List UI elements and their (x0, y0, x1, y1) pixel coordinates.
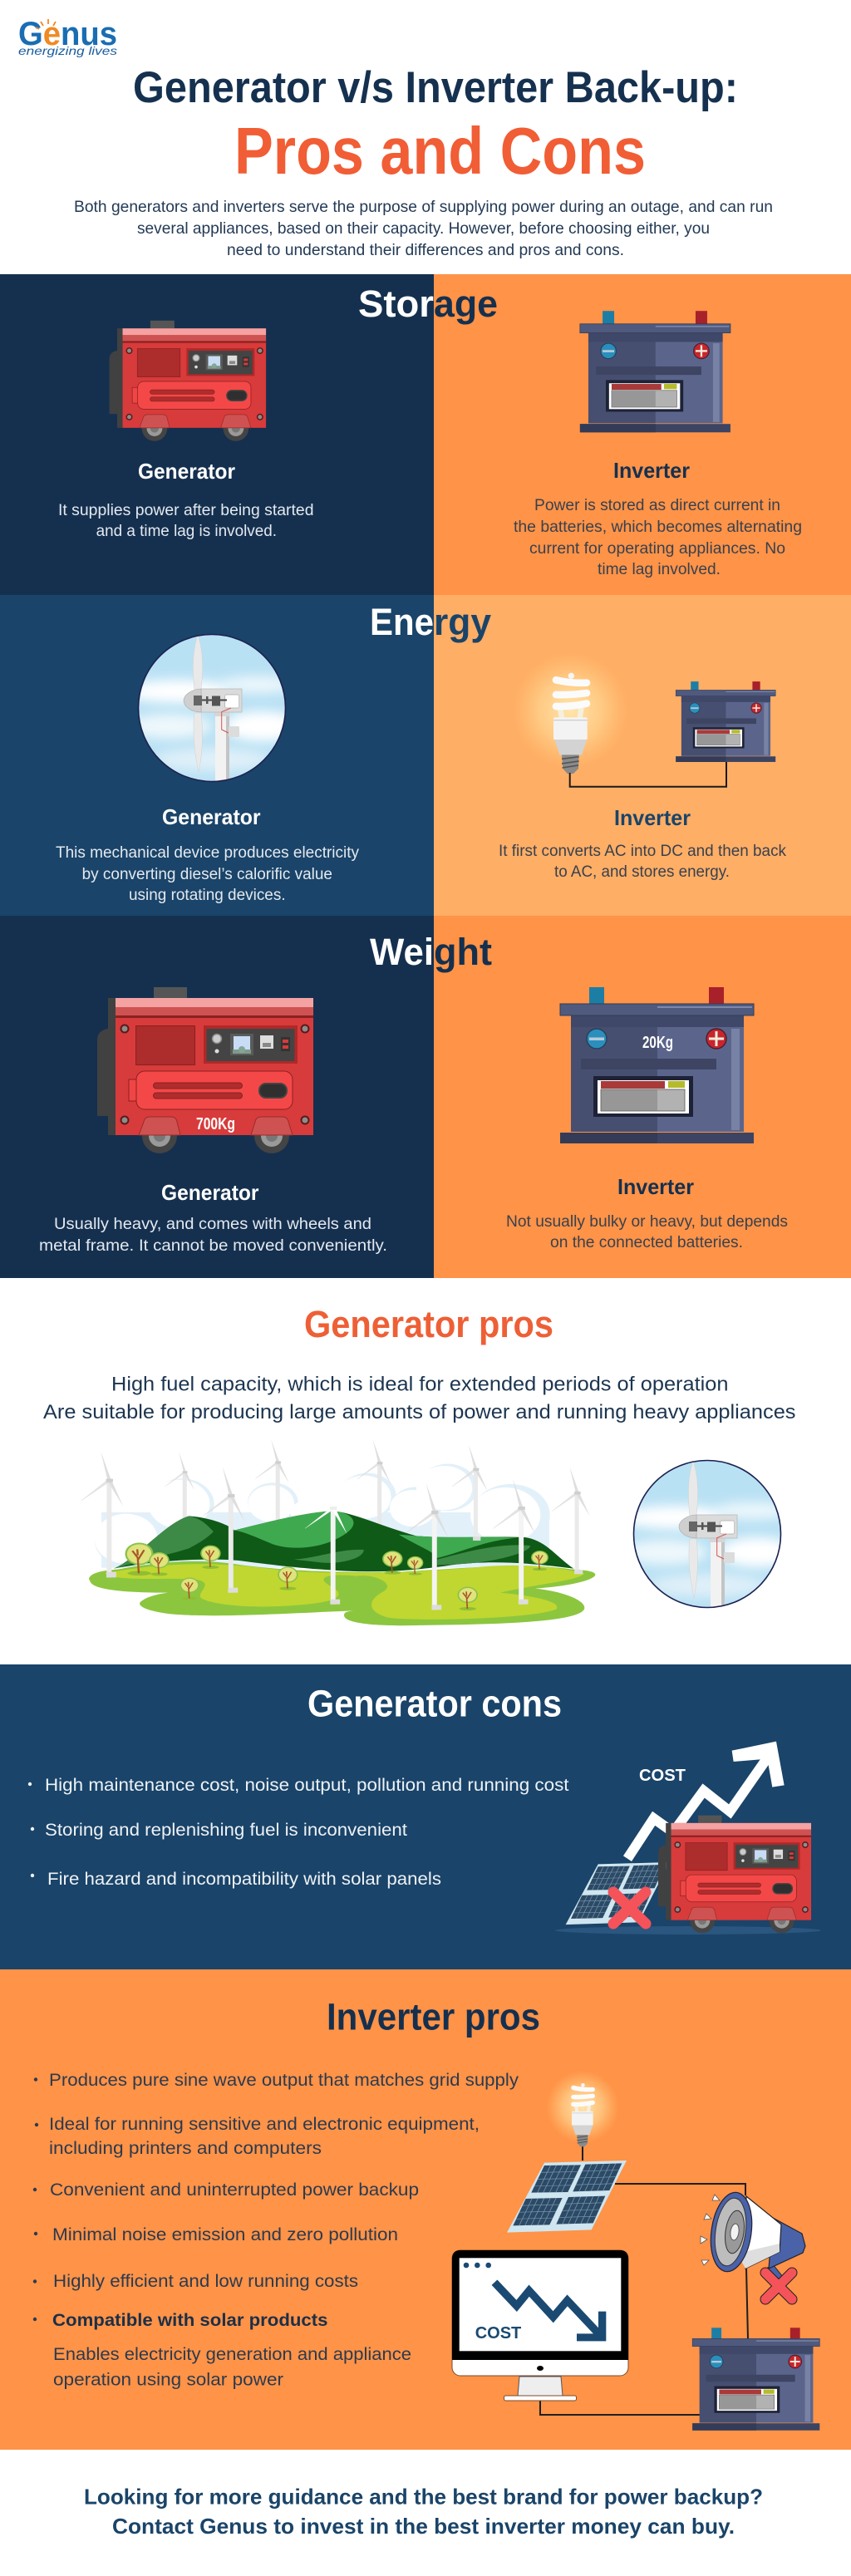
generator column text: Usually heavy, and comes with wheels and (54, 1216, 371, 1233)
heading: Generator pros: Generator pros (304, 1303, 553, 1345)
pros list: Convenient and uninterrupted power backup (50, 2180, 419, 2200)
heading: Weight: Wei (370, 931, 434, 973)
inverter column text: Inverter (613, 458, 690, 483)
closing call to action (84, 2485, 763, 2539)
icon: generator 700Kg: 700Kg (196, 1115, 235, 1133)
pros list: Highly efficient and low running costs (53, 2272, 358, 2291)
generator column text: It supplies power after being started (58, 502, 314, 519)
panel: weight (0, 916, 851, 1278)
pros list (33, 2071, 519, 2390)
pros list: Produces pure sine wave output that matches grid supply (49, 2071, 519, 2090)
pros list: Minimal noise emission and zero pollution (52, 2225, 398, 2244)
heading: Energy: rgy (434, 601, 491, 643)
pros text (43, 1373, 795, 1423)
icon: turbine cutaway (125, 633, 299, 783)
pros text: Are suitable for producing large amounts of power and running heavy appliances (43, 1401, 795, 1423)
heading: Inverter pros: Inverter pros (327, 1996, 540, 2038)
logo: Genus: Genus (18, 16, 117, 52)
pros text: High fuel capacity, which is ideal for extended periods of operation (111, 1373, 728, 1396)
generator column text (58, 459, 314, 540)
heading: Storage: Stor (358, 283, 434, 325)
inverter column text (506, 1174, 788, 1251)
cons list (28, 1776, 569, 1889)
intro text: Both generators and inverters serve the purpose of supplying power during an outage, and can run (74, 198, 773, 216)
generator column text (56, 804, 359, 904)
illustration: wind farm (81, 1439, 595, 1625)
heading: Storage (358, 283, 498, 325)
cons list: Storing and replenishing fuel is inconvenient (45, 1821, 407, 1840)
generator column text: by converting diesel’s calorific value (82, 866, 332, 883)
title: Pros and Cons (234, 114, 646, 188)
pros list: Ideal for running sensitive and electronic equipment, (49, 2115, 480, 2134)
heading: Weight (370, 931, 492, 973)
heading: Energy (370, 601, 491, 643)
inverter column text (499, 805, 786, 881)
cons list: High maintenance cost, noise output, pollution and running cost (45, 1776, 569, 1795)
arrow: cost rising (627, 1742, 785, 1859)
inverter column text: Not usually bulky or heavy, but depends (506, 1213, 788, 1231)
generator column text (39, 1180, 387, 1255)
pros list: Compatible with solar products (52, 2311, 327, 2330)
inverter column text (514, 458, 802, 578)
generator column text: and a time lag is involved. (96, 523, 277, 540)
icon: generator (110, 321, 266, 441)
inverter column text: Inverter (614, 805, 691, 830)
panel: inverter pros (0, 1969, 851, 2450)
pros list: including printers and computers (49, 2139, 322, 2158)
icon: bulb (546, 2070, 619, 2146)
title: Generator v/s Inverter Back-up: (133, 63, 738, 112)
intro text: several appliances, based on their capacity. However, before choosing either, you (137, 219, 710, 238)
closing call to action: Looking for more guidance and the best brand for power backup? (84, 2485, 763, 2510)
inverter column text: It first converts AC into DC and then back (499, 843, 786, 860)
icon: red cross (613, 1892, 646, 1924)
closing call to action: Contact Genus to invest in the best inverter money can buy. (112, 2514, 735, 2539)
inverter column text: the batteries, which becomes alternating (514, 519, 802, 536)
generator column text: Generator (162, 804, 261, 829)
heading: Energy: Ene (370, 601, 434, 643)
inverter column text: Inverter (617, 1174, 694, 1199)
panel: energy (0, 595, 851, 916)
icon: solar panel (507, 2161, 627, 2233)
generator column text: Generator (161, 1180, 259, 1205)
panel: storage (0, 274, 851, 595)
inverter column text: to AC, and stores energy. (554, 863, 730, 881)
generator column text: This mechanical device produces electricity (56, 844, 359, 862)
icon: monitor with falling cost (452, 2250, 628, 2401)
icon: battery (580, 311, 730, 432)
label: COST: COST (475, 2324, 521, 2342)
heading: Weight: ght (434, 931, 492, 973)
inverter column text: on the connected batteries. (550, 1234, 743, 1251)
panel: generator pros (0, 1278, 851, 1664)
heading: Storage: age (434, 283, 498, 325)
arrow: cost falling (494, 2283, 606, 2341)
icon: generator (658, 1816, 811, 1933)
generator column text: Generator (138, 459, 235, 484)
inverter column text: Power is stored as direct current in (534, 497, 780, 514)
icon: bulb and battery circuit (513, 652, 775, 787)
cons list: Fire hazard and incompatibility with solar panels (47, 1870, 441, 1889)
icon: generator 700Kg (97, 987, 313, 1153)
title (133, 63, 738, 188)
icon: battery 20Kg: 20Kg (642, 1034, 673, 1052)
icon: loudspeaker with cross (701, 2190, 805, 2299)
intro text (74, 198, 773, 259)
heading: Generator cons: Generator cons (307, 1682, 562, 1725)
logo: Genus: energizing lives (18, 44, 117, 57)
icon: battery 20Kg (560, 987, 754, 1143)
illustration: rising cost with generator and solar panel (555, 1742, 821, 1934)
generator column text: using rotating devices. (129, 887, 286, 904)
inverter column text: current for operating appliances. No (529, 540, 785, 558)
icon: solar panel (566, 1862, 670, 1925)
icon: turbine cutaway (620, 1459, 794, 1609)
wires (540, 2146, 748, 2415)
panel: generator cons (0, 1664, 851, 1969)
intro text: need to understand their differences and pros and cons. (227, 241, 624, 259)
inverter column text: time lag involved. (598, 561, 721, 578)
label: COST: COST (639, 1767, 686, 1785)
pros list: Enables electricity generation and appliance (53, 2345, 411, 2364)
icon: battery (692, 2328, 819, 2431)
pros list: operation using solar power (53, 2370, 283, 2390)
generator column text: metal frame. It cannot be moved conveniently. (39, 1237, 387, 1255)
